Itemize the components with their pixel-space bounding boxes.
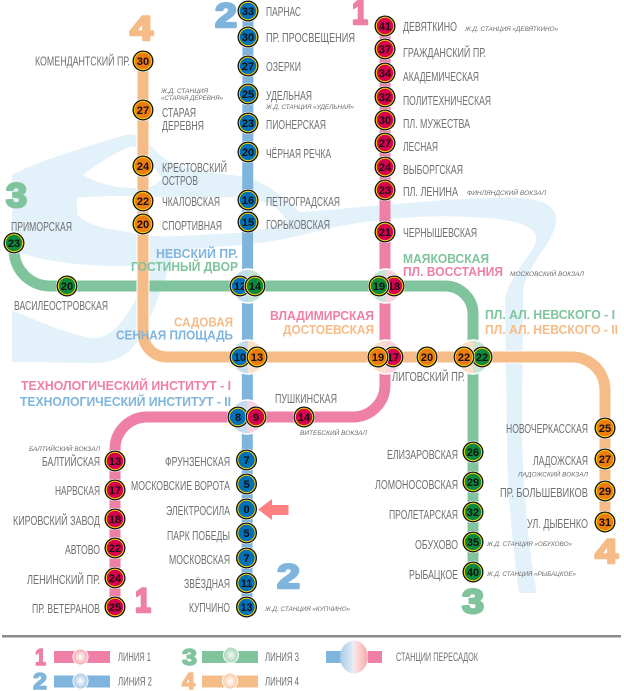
line 2 south labels: КУПЧИНО <box>189 601 230 615</box>
line 3 south stations: 26 <box>467 447 479 459</box>
interchange stations: 9 <box>253 412 259 424</box>
line 4 north labels: «СТАРАЯ ДЕРЕВНЯ» <box>161 95 223 102</box>
interchange labels: МАЯКОВСКАЯ <box>403 252 489 266</box>
line 1 south stations: 25 <box>109 602 121 614</box>
line 2 north labels: ГОРЬКОВСКАЯ <box>266 218 330 232</box>
line 3 south stations: 35 <box>467 537 479 549</box>
line 1 (pink) <box>115 26 385 607</box>
line 1 south labels: КИРОВСКИЙ ЗАВОД <box>13 513 100 528</box>
line 1 south stations: 18 <box>109 514 121 526</box>
legend: ЛИНИЯ 1 <box>118 650 151 664</box>
line 2 south stations: 5 <box>243 528 250 540</box>
interchange stations: 12 <box>234 281 246 293</box>
interchange stations: 14 <box>298 412 311 424</box>
line 1 north stations: 34 <box>379 68 392 80</box>
interchange labels: ВЛАДИМИРСКАЯ <box>270 309 374 323</box>
legend <box>2 635 621 691</box>
legend: ЛИНИЯ 3 <box>265 650 299 664</box>
line 2 south stations: 7 <box>243 553 250 565</box>
line 4 south labels <box>500 422 589 531</box>
line 2 north stations: 27 <box>242 61 254 73</box>
line 4 north labels: ЧКАЛОВСКАЯ <box>162 195 220 209</box>
line 4 south stations: 29 <box>599 486 611 498</box>
line 2 south stations: 11 <box>241 578 252 590</box>
line 1 north stations: 27 <box>379 138 391 150</box>
line 2 north stations: 23 <box>242 118 254 130</box>
interchange stations: 19 <box>373 281 385 293</box>
line 1 south stations: 22 <box>109 543 121 555</box>
line 1 north labels: ВЫБОРГСКАЯ <box>403 163 463 177</box>
line 4 south stations: 25 <box>599 423 611 435</box>
arrow: current station marker <box>258 499 288 520</box>
line 4 north labels: КРЕСТОВСКИЙ <box>162 160 227 175</box>
central station labels: ВИТЕБСКИЙ ВОКЗАЛ <box>300 428 368 437</box>
line 4 north labels: ДЕРЕВНЯ <box>162 119 204 133</box>
line 2 north stations: 16 <box>242 195 254 207</box>
line 1 north stations: 23 <box>379 185 391 197</box>
line 4 north stations: 27 <box>137 105 149 117</box>
line 2 north labels <box>265 5 355 232</box>
line 2 north labels: ЧЁРНАЯ РЕЧКА <box>266 147 331 161</box>
river background <box>12 135 556 593</box>
line 1 north stations: 21 <box>379 227 391 239</box>
line 1 north stations: 37 <box>379 44 391 56</box>
line 2 (blue) <box>247 11 248 607</box>
line numbers: 4 <box>130 10 153 48</box>
line 3 west labels: ВАСИЛЕОСТРОВСКАЯ <box>14 299 108 313</box>
line numbers: 4 <box>595 533 618 571</box>
line 3 west stations: 23 <box>8 238 20 250</box>
line 1 north labels: Ж.Д. СТАНЦИЯ «ДЕВЯТКИНО» <box>464 26 558 33</box>
line 1 south labels: БАЛТИЙСКИЙ ВОКЗАЛ <box>29 444 101 453</box>
interchange labels: ПЛ. ВОССТАНИЯ <box>403 265 503 279</box>
line 3 south labels: ОБУХОВО <box>415 538 458 552</box>
line numbers: 1 <box>135 582 151 620</box>
line 2 north stations: 33 <box>242 6 254 18</box>
central station labels: МОСКОВСКИЙ ВОКЗАЛ <box>510 269 585 278</box>
line 3 south labels: ЛОМОНОСОВСКАЯ <box>375 478 458 492</box>
line 1 north labels: ПЛ. ЛЕНИНА <box>403 185 458 199</box>
central station labels: ЛИГОВСКИЙ ПР. <box>392 369 465 384</box>
interchange stations: 18 <box>388 281 400 293</box>
line 2 south stations: 7 <box>243 455 250 467</box>
line 4 south labels: ЛАДОЖСКАЯ <box>533 454 588 468</box>
line 1 north stations: 24 <box>379 162 392 174</box>
line numbers: 2 <box>277 558 300 596</box>
interchange halos <box>230 269 490 434</box>
interchange labels: ДОСТОЕВСКАЯ <box>283 323 374 337</box>
line numbers: 3 <box>6 177 27 215</box>
line 2 south stations: 0 <box>243 504 250 516</box>
line 4 north stations: 30 <box>137 56 149 68</box>
interchange labels: ПЛ. АЛ. НЕВСКОГО - II <box>485 323 618 337</box>
line 2 south labels: ЗВЁЗДНАЯ <box>184 577 230 591</box>
line 3 south labels: ПРОЛЕТАРСКАЯ <box>389 508 458 522</box>
line 3 west stations <box>3 232 78 297</box>
interchange stations <box>227 275 493 428</box>
line 2 south stations: 13 <box>240 602 253 614</box>
interchange stations: 17 <box>387 352 399 364</box>
line 1 south labels: ЛЕНИНСКИЙ ПР. <box>27 572 100 587</box>
interchange stations: 22 <box>458 352 470 364</box>
line 2 north labels: ПИОНЕРСКАЯ <box>266 118 326 132</box>
line 4 south stations: 27 <box>599 454 611 466</box>
line 3 south labels: Ж.Д. СТАНЦИЯ «РЫБАЦКОЕ» <box>486 571 576 578</box>
line 1 north labels: ЧЕРНЫШЕВСКАЯ <box>403 226 477 240</box>
line 4 north stations: 20 <box>137 219 149 231</box>
interchange labels: САДОВАЯ <box>174 316 233 330</box>
line 2 north stations: 25 <box>242 89 254 101</box>
line 4 south labels: УЛ. ДЫБЕНКО <box>527 517 588 531</box>
line 1 south labels: БАЛТИЙСКАЯ <box>42 454 100 469</box>
line 3 (green) <box>14 243 473 572</box>
line 2 south labels: МОСКОВСКИЕ ВОРОТА <box>131 479 230 493</box>
line 4 north labels: ОСТРОВ <box>162 174 198 188</box>
interchange stations: 10 <box>234 352 246 364</box>
line 1 north stations <box>374 15 396 243</box>
line 3 south stations: 29 <box>467 477 479 489</box>
interchange labels: НЕВСКИЙ ПР. <box>156 246 238 261</box>
interchange labels: ПЛ. АЛ. НЕВСКОГО - I <box>485 308 615 322</box>
legend: СТАНЦИИ ПЕРЕСАДОК <box>396 650 478 664</box>
line 1 north labels: ЛЕСНАЯ <box>403 140 438 154</box>
line 2 south stations <box>236 449 257 618</box>
line 4 north stations: 22 <box>137 196 149 208</box>
interchange stations: 19 <box>372 352 384 364</box>
interchange stations: 20 <box>421 352 433 364</box>
line 2 south stations: 5 <box>243 479 250 491</box>
central station labels: ПУШКИНСКАЯ <box>275 392 337 406</box>
line 2 north labels: ОЗЕРКИ <box>266 60 301 74</box>
line 1 south labels: ПР. ВЕТЕРАНОВ <box>32 602 100 616</box>
line 1 north stations: 41 <box>379 21 391 33</box>
line 1 south labels <box>13 444 101 616</box>
central station labels <box>275 269 585 437</box>
interchange labels <box>20 246 618 409</box>
interchange labels: ТЕХНОЛОГИЧЕСКИЙ ИНСТИТУТ - I <box>21 378 231 393</box>
legend: ЛИНИЯ 2 <box>118 674 152 688</box>
line 4 south stations: 31 <box>599 517 611 529</box>
line 4 south labels: ПР. БОЛЬШЕВИКОВ <box>500 486 588 500</box>
line numbers: 3 <box>462 583 484 621</box>
line 1 south labels: НАРВСКАЯ <box>55 484 100 498</box>
line 3 south labels: Ж.Д. СТАНЦИЯ «ОБУХОВО» <box>486 541 572 548</box>
line 2 north stations: 30 <box>242 32 254 44</box>
legend: 1 <box>35 644 46 670</box>
interchange stations: 22 <box>476 352 488 364</box>
line 3 south labels <box>375 448 576 582</box>
line 2 north labels: ПЕТРОГРАДСКАЯ <box>266 195 340 209</box>
line 4 north labels: Ж.Д. СТАНЦИЯ <box>160 88 209 95</box>
line 1 north labels <box>403 20 558 240</box>
interchange labels: СЕННАЯ ПЛОЩАДЬ <box>116 328 233 342</box>
line 2 south labels: ЭЛЕКТРОСИЛА <box>166 504 230 518</box>
line 4 south labels: ЛАДОЖСКИЙ ВОКЗАЛ <box>517 470 589 478</box>
line 1 north labels: ГРАЖДАНСКИЙ ПР. <box>403 45 486 60</box>
legend: 3 <box>182 644 197 670</box>
interchange stations: 14 <box>249 281 262 293</box>
line 2 north labels: ПР. ПРОСВЕЩЕНИЯ <box>266 31 355 45</box>
line 2 south labels: МОСКОВСКАЯ <box>169 553 230 567</box>
line 2 south labels: ФРУНЗЕНСКАЯ <box>165 455 230 469</box>
line 2 south labels <box>131 455 350 615</box>
line 2 north stations <box>237 0 259 233</box>
line 2 north stations: 20 <box>242 147 254 159</box>
line 2 south labels: ПАРК ПОБЕДЫ <box>167 529 230 543</box>
line 1 north labels: ФИНЛЯНДСКИЙ ВОКЗАЛ <box>467 188 547 197</box>
line 4 north labels: СПОРТИВНАЯ <box>162 219 222 233</box>
line 1 north labels: ПОЛИТЕХНИЧЕСКАЯ <box>403 94 491 108</box>
line 4 north stations <box>132 50 154 235</box>
line 2 north stations: 15 <box>242 217 254 229</box>
line 1 north labels: ДЕВЯТКИНО <box>403 20 457 34</box>
line 4 (orange) <box>143 61 605 522</box>
line 3 south stations: 40 <box>467 567 479 579</box>
interchange labels: ТЕХНОЛОГИЧЕСКИЙ ИНСТИТУТ - II <box>20 394 231 409</box>
line 1 south stations: 13 <box>109 456 121 468</box>
line 3 south labels: РЫБАЦКОЕ <box>409 568 458 582</box>
line 2 north labels: ПАРНАС <box>266 5 301 19</box>
line 3 west stations: 20 <box>61 281 73 293</box>
line 2 north labels: УДЕЛЬНАЯ <box>266 89 312 103</box>
line 1 south labels: АВТОВО <box>65 543 100 557</box>
line 4 south labels: НОВОЧЕРКАССКАЯ <box>506 422 588 436</box>
line 4 north stations: 24 <box>137 161 150 173</box>
line 3 south stations <box>462 441 484 583</box>
line 1 north labels: ПЛ. МУЖЕСТВА <box>403 117 470 131</box>
line 3 south stations: 32 <box>467 507 479 519</box>
line 1 south stations: 17 <box>109 485 121 497</box>
line 3 west labels: ПРИМОРСКАЯ <box>11 220 72 234</box>
line 2 north labels: Ж.Д. СТАНЦИЯ «УДЕЛЬНАЯ» <box>265 104 354 111</box>
interchange labels: ГОСТИНЫЙ ДВОР <box>131 259 238 274</box>
interchange stations: 8 <box>235 412 241 424</box>
line 1 north labels: АКАДЕМИЧЕСКАЯ <box>403 70 479 84</box>
interchange stations: 13 <box>251 352 263 364</box>
line 4 south stations <box>594 417 616 533</box>
line 1 north stations: 32 <box>379 92 391 104</box>
line 3 south labels: ЕЛИЗАРОВСКАЯ <box>387 448 458 462</box>
line 4 north labels <box>35 54 227 233</box>
line 4 north labels: КОМЕНДАНТСКИЙ ПР. <box>35 54 130 68</box>
line 1 south stations: 24 <box>109 573 122 585</box>
line 4 north labels: СТАРАЯ <box>162 106 196 120</box>
line 1 north stations: 30 <box>379 115 391 127</box>
line 2 south labels: Ж.Д. СТАНЦИЯ «КУПЧИНО» <box>264 606 350 613</box>
legend: ЛИНИЯ 4 <box>265 674 299 688</box>
line 1 south stations <box>104 450 126 618</box>
line 3 west labels <box>11 220 108 313</box>
